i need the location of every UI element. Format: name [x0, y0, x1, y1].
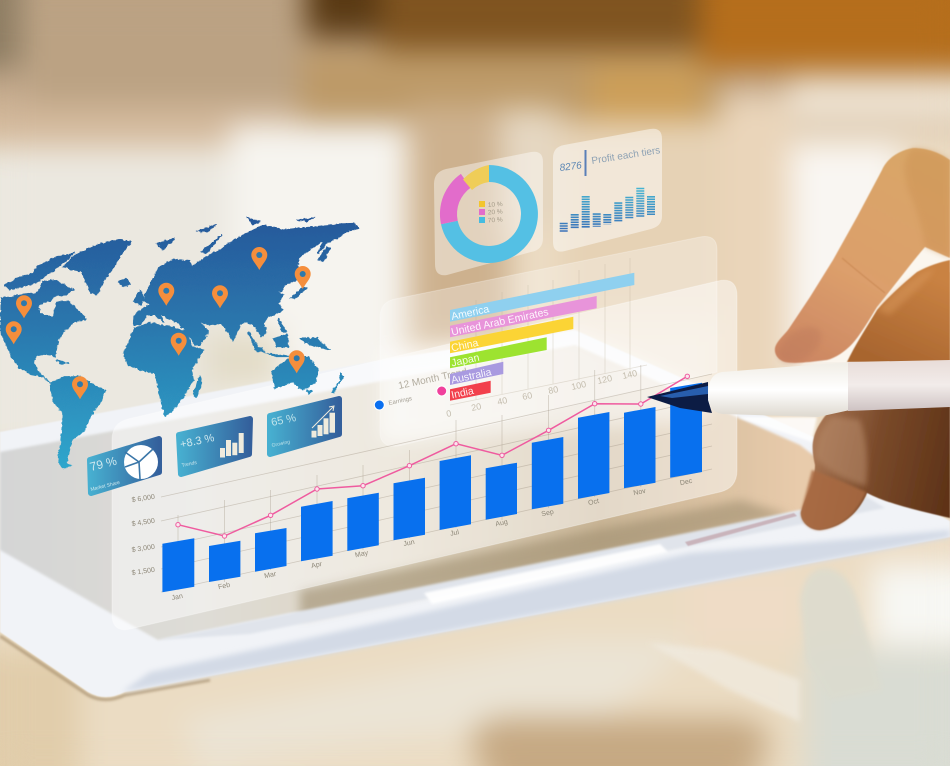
donut legend: 10 % [488, 201, 503, 209]
profit caption: Profit each tiers [591, 145, 661, 167]
stat card: growing: 65 % [270, 412, 297, 429]
index finger [775, 148, 950, 363]
stat card: trends [179, 419, 250, 474]
tablet screen [0, 345, 867, 640]
trend legend [374, 367, 468, 410]
month labels: Aug [495, 519, 509, 528]
trend legend: 12 Month Trend [397, 367, 468, 392]
y axis labels: $ 6,000 [131, 494, 156, 504]
screen dark band [300, 500, 790, 618]
knuckle crease [842, 258, 885, 293]
month labels: Sep [541, 509, 555, 518]
stat card: growing: Growing [271, 439, 291, 449]
tablet [0, 330, 950, 722]
donut chart [440, 165, 538, 263]
screen glare [380, 332, 720, 440]
pen reflection on table [648, 643, 800, 722]
month labels: Jul [450, 529, 460, 538]
fingertip shading [772, 320, 828, 370]
white gap between fingers [822, 246, 950, 362]
horizontal bar chart: countries [374, 258, 647, 419]
bezel highlight [424, 544, 668, 604]
stat card: market share [88, 439, 159, 493]
monthly column chart [131, 365, 712, 602]
month labels: Mar [264, 571, 278, 580]
profit heading: 8276 [559, 160, 583, 174]
month labels: May [354, 550, 369, 559]
bar labels: Japan [450, 352, 481, 369]
stat card: market share: Market Share [90, 480, 121, 493]
chart gridlines [161, 365, 712, 592]
thumb tip [801, 470, 866, 530]
middle finger [847, 260, 950, 365]
tablet bezel [0, 330, 950, 697]
tablet shadow [0, 636, 210, 700]
stat card: market share: 79 % [88, 454, 119, 474]
pen barrel [708, 362, 850, 417]
bar labels: United Arab Emirates [450, 306, 550, 338]
pen reflection [737, 417, 817, 442]
world map [1, 217, 358, 468]
bar axis numbers: 140 [621, 368, 638, 381]
pen tip sheen [660, 386, 708, 398]
bar labels: India [450, 385, 475, 401]
bar axis numbers: 80 [547, 384, 559, 396]
month labels: Feb [218, 582, 231, 591]
thumb [801, 405, 950, 530]
pen tip [647, 382, 712, 413]
pen grip [848, 360, 950, 411]
blue columns [162, 383, 702, 592]
trend legend: Earnings [388, 396, 413, 407]
bar axis numbers: 100 [570, 379, 587, 392]
y axis labels [131, 494, 156, 577]
month labels: Jun [403, 539, 415, 548]
y axis labels: $ 1,500 [131, 567, 156, 577]
bar axis numbers: 60 [521, 390, 533, 402]
bar axis numbers: 40 [496, 395, 508, 407]
bar labels: America [450, 303, 490, 323]
map location pins [6, 247, 311, 399]
panel: profit tiers card [553, 129, 662, 252]
bar axis numbers: 20 [470, 401, 482, 413]
pink trend line [176, 374, 690, 538]
donut legend: 20 % [488, 208, 503, 216]
month labels: Nov [633, 488, 647, 497]
panel: donut chart card [434, 152, 543, 275]
bezel inner strip [158, 497, 885, 640]
hand holding pen [647, 148, 950, 530]
month labels [171, 478, 693, 602]
heading divider [584, 150, 586, 176]
bar axis numbers: 0 [445, 408, 452, 419]
bar labels: Australia [450, 366, 493, 386]
stat card: growing [270, 399, 339, 454]
bar labels: China [450, 337, 480, 354]
hand reflection on table [800, 568, 882, 700]
bezel edge accent [685, 513, 797, 546]
striped mini bar chart [564, 188, 651, 233]
bar labels [450, 303, 550, 401]
bezel lower shade [122, 530, 950, 692]
panel: bar ranking back card [380, 237, 717, 446]
panel: monthly chart card [112, 280, 737, 630]
thumb nail highlight [815, 416, 867, 486]
donut legend: 70 % [488, 216, 503, 224]
middle finger highlight [877, 268, 935, 315]
month labels: Dec [679, 478, 693, 487]
bar axis numbers: 120 [596, 373, 613, 386]
stat card: trends: +8.3 % [179, 432, 216, 451]
stat card: trends: Trends [181, 460, 198, 469]
bars [450, 273, 634, 401]
bar axis numbers [445, 368, 638, 419]
bar chart gridlines [450, 258, 647, 405]
month labels: Apr [311, 561, 323, 570]
donut legend [479, 201, 503, 224]
month labels: Jan [171, 593, 184, 602]
y axis labels: $ 3,000 [131, 544, 156, 554]
month labels: Oct [588, 498, 600, 507]
knuckle block [904, 148, 950, 258]
y axis labels: $ 4,500 [131, 518, 156, 528]
